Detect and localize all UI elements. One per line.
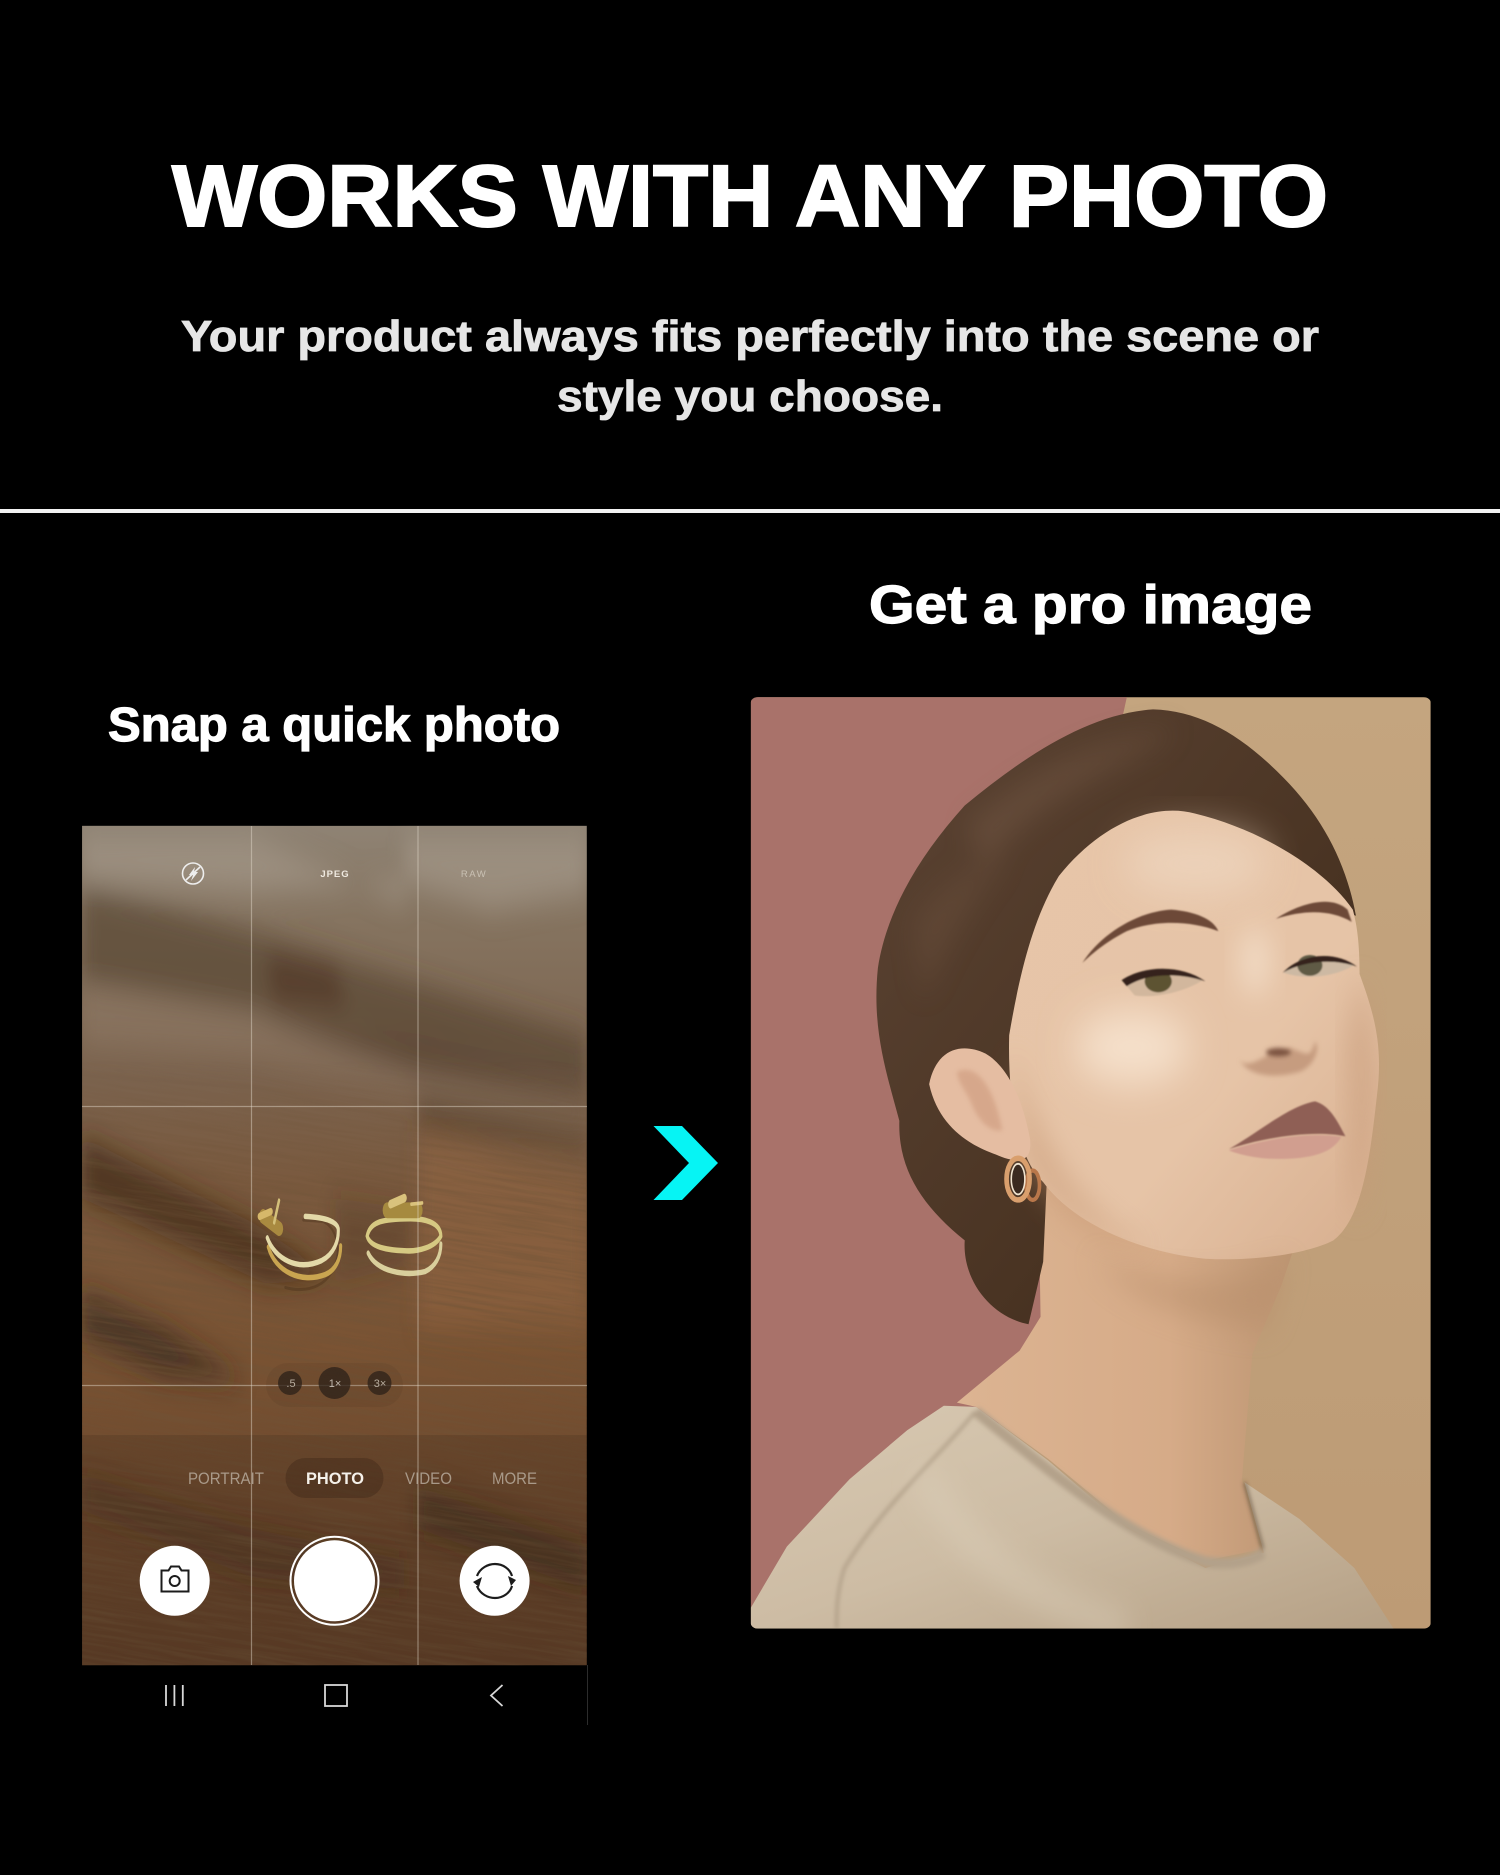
ear: [929, 1048, 1030, 1160]
title: WORKS WITH ANY PHOTO: [172, 148, 1328, 245]
zoom selector: 3×: [374, 1378, 386, 1390]
label: RAW: RAW: [461, 869, 487, 880]
lips: [1229, 1101, 1345, 1159]
eyebrows: [1082, 902, 1352, 963]
shirt: [751, 1406, 1394, 1629]
zoom selector: 1×: [329, 1378, 341, 1390]
arrow: [654, 1126, 718, 1200]
icon: flip camera button: [460, 1546, 530, 1616]
earring: [1007, 1158, 1040, 1200]
left earring: [260, 1201, 341, 1290]
camera modes: PORTRAIT: [188, 1469, 264, 1488]
zoom selector: [266, 1363, 403, 1407]
camera modes: MORE: [492, 1469, 537, 1488]
hair highlights: [929, 746, 1125, 942]
heading: snap a quick photo: Snap a quick photo: [108, 699, 560, 752]
camera modes: VIDEO: [405, 1469, 452, 1488]
panel: phone camera screenshot: [82, 826, 718, 1725]
face shading: [1012, 833, 1375, 1329]
nose shading: [1239, 1041, 1317, 1076]
zoom selector: .5: [286, 1378, 296, 1390]
label: JPEG: JPEG: [320, 869, 350, 880]
face: [1009, 811, 1379, 1259]
heading: get a pro image: Get a pro image: [869, 575, 1312, 635]
camera grid lines: [82, 826, 587, 1665]
hair: [876, 709, 1356, 1324]
panel: portrait photo with earring: [751, 697, 1431, 1629]
subtitle: Your product always fits perfectly into the scene or: [181, 312, 1319, 361]
right earring: [367, 1198, 441, 1273]
shirt folds: [837, 1412, 1264, 1629]
subtitle: style you choose.: [557, 372, 943, 421]
wood photo with earrings: [82, 826, 587, 1666]
camera modes: PHOTO: [306, 1469, 364, 1488]
subtitle: [181, 312, 1319, 421]
divider: [0, 509, 1500, 513]
eye right: [1283, 955, 1357, 977]
neck: [957, 1186, 1292, 1557]
camera modes: [188, 1458, 537, 1498]
eye left: [1122, 969, 1205, 996]
shutter button: [290, 1537, 378, 1625]
backdrop: pink and tan: [751, 697, 1431, 1629]
icon: gallery camera button: [140, 1546, 210, 1616]
camera mode dark band: [82, 1435, 587, 1665]
icon: flash off: [182, 863, 204, 884]
android navigation bar: [166, 1665, 588, 1725]
